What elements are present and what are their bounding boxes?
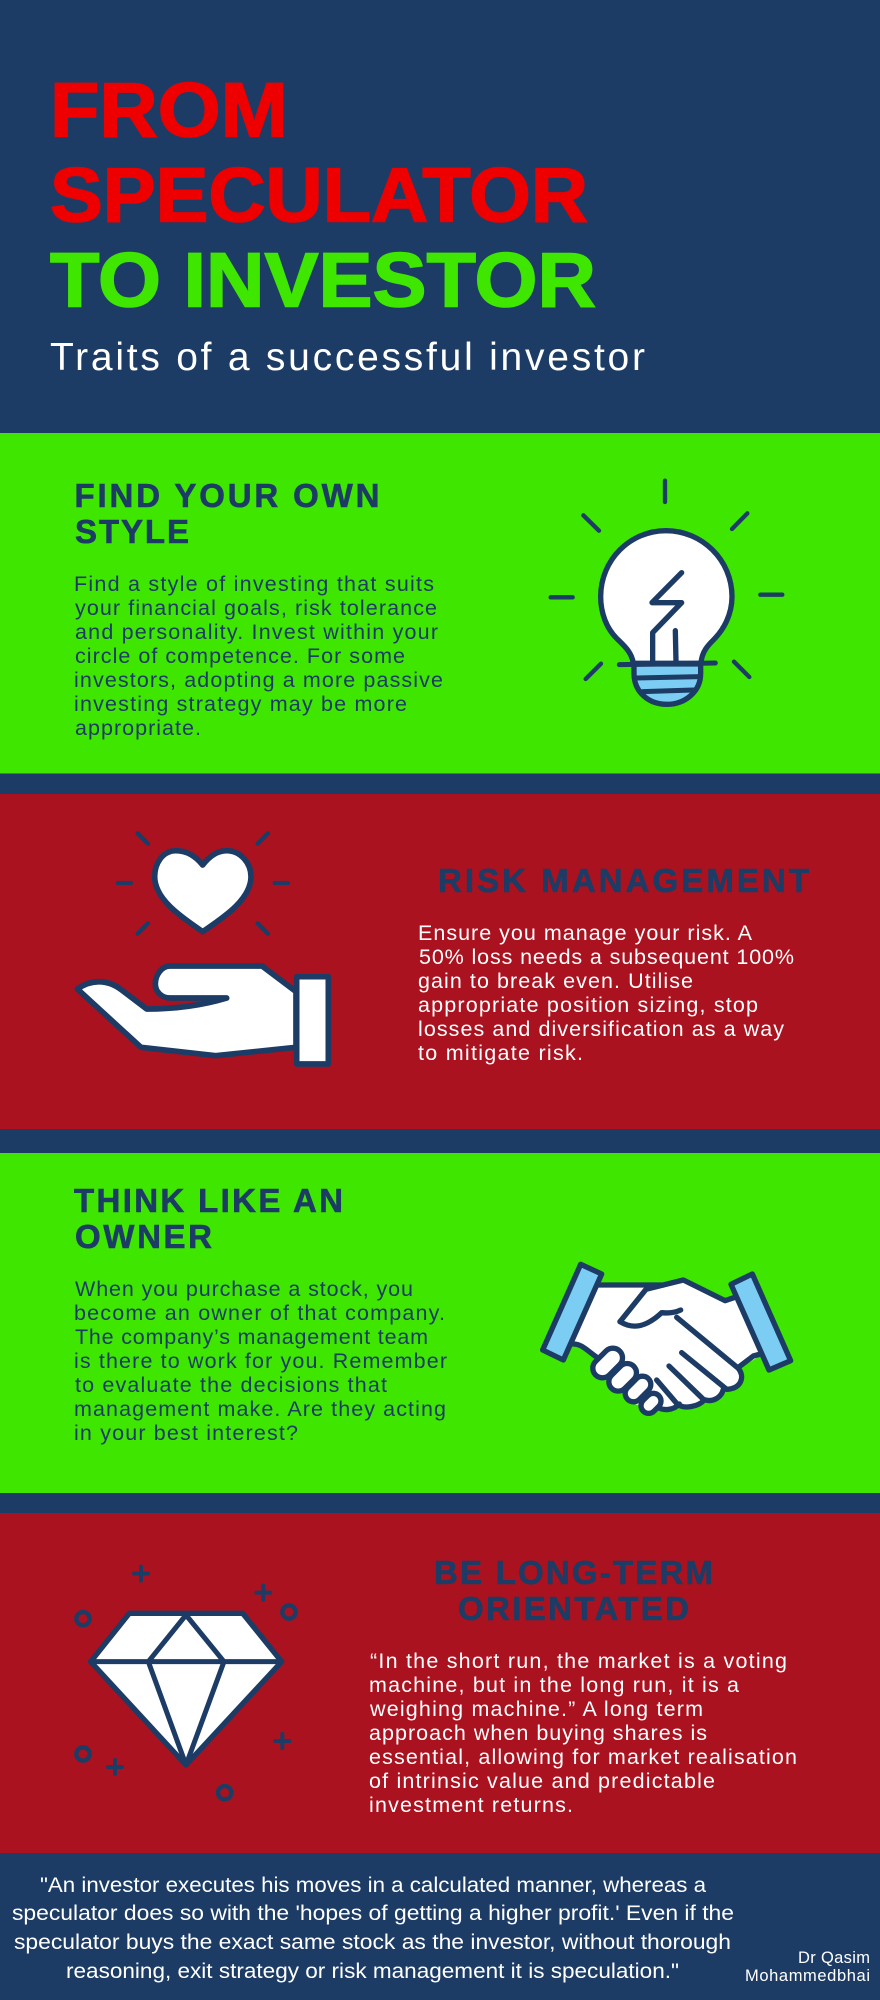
text: think like an owner: When you purchase a stock, you bbox=[75, 1277, 413, 1301]
text: think like an owner bbox=[74, 1277, 447, 1445]
text: risk management: appropriate position sizing, stop bbox=[418, 993, 758, 1017]
footer author credit bbox=[745, 1949, 870, 1985]
heading: think like an owner: THINK LIKE AN bbox=[74, 1182, 343, 1219]
text: find your own style: circle of competence. For some bbox=[75, 644, 405, 668]
icon: hand holding heart bbox=[77, 833, 328, 1064]
text: risk management: losses and diversification as a way bbox=[418, 1017, 784, 1041]
panel: find your own style bbox=[0, 433, 880, 774]
heading: find your own style: FIND YOUR OWN bbox=[74, 477, 380, 514]
footer quote: reasoning, exit strategy or risk management it is speculation." bbox=[66, 1959, 679, 1983]
panel: think like an owner bbox=[0, 1153, 880, 1493]
text: think like an owner: is there to work for you. Remember bbox=[74, 1349, 447, 1373]
text: find your own style: and personality. Invest within your bbox=[75, 620, 438, 644]
heading: find your own style bbox=[74, 477, 380, 550]
icon: diamond bbox=[76, 1567, 296, 1799]
text: be long-term orientated: essential, allowing for market realisation bbox=[369, 1745, 797, 1769]
heading: be long-term orientated: BE LONG-TERM bbox=[434, 1554, 713, 1591]
text: risk management: Ensure you manage your risk. A bbox=[418, 921, 753, 945]
panel: be long-term orientated bbox=[0, 1513, 880, 1853]
footer author credit: Mohammedbhai bbox=[745, 1967, 870, 1985]
heading: be long-term orientated: ORIENTATED bbox=[458, 1590, 689, 1627]
text: be long-term orientated: machine, but in the long run, it is a bbox=[369, 1673, 739, 1697]
subtitle: Traits of a successful investor bbox=[50, 336, 645, 379]
heading: be long-term orientated bbox=[434, 1554, 713, 1627]
text: risk management: to mitigate risk. bbox=[418, 1041, 583, 1065]
footer quote: speculator buys the exact same stock as the investor, without thorough bbox=[14, 1930, 731, 1954]
text: risk management: gain to break even. Utilise bbox=[418, 969, 693, 993]
text: risk management bbox=[418, 921, 794, 1065]
heading: think like an owner bbox=[74, 1182, 343, 1255]
text: find your own style bbox=[74, 572, 443, 740]
text: be long-term orientated: “In the short run, the market is a voting bbox=[370, 1649, 787, 1673]
text: find your own style: your financial goals, risk tolerance bbox=[75, 596, 437, 620]
text: find your own style: investors, adopting a more passive bbox=[74, 668, 443, 692]
title: TO INVESTOR bbox=[50, 238, 596, 324]
title bbox=[50, 68, 596, 324]
text: be long-term orientated: investment returns. bbox=[369, 1793, 573, 1817]
title: FROM bbox=[50, 68, 288, 154]
panel: risk management bbox=[0, 794, 880, 1129]
text: think like an owner: to evaluate the decisions that bbox=[75, 1373, 387, 1397]
heading: risk management: RISK MANAGEMENT bbox=[438, 862, 809, 899]
heading: think like an owner: OWNER bbox=[75, 1218, 212, 1255]
footer quote: speculator does so with the 'hopes of getting a higher profit.' Even if the bbox=[12, 1901, 734, 1925]
text: think like an owner: management make. Are they acting bbox=[74, 1397, 446, 1421]
text: risk management: 50% loss needs a subsequent 100% bbox=[419, 945, 794, 969]
text: find your own style: Find a style of investing that suits bbox=[74, 572, 434, 596]
text: find your own style: appropriate. bbox=[75, 716, 201, 740]
text: be long-term orientated: weighing machine.” A long term bbox=[369, 1697, 703, 1721]
footer quote: "An investor executes his moves in a calculated manner, whereas a bbox=[40, 1873, 706, 1897]
text: be long-term orientated: of intrinsic value and predictable bbox=[369, 1769, 715, 1793]
footer author credit: Dr Qasim bbox=[798, 1949, 870, 1967]
text: think like an owner: in your best interest? bbox=[74, 1421, 298, 1445]
text: think like an owner: The company’s management team bbox=[75, 1325, 428, 1349]
text: find your own style: investing strategy may be more bbox=[74, 692, 407, 716]
heading: find your own style: STYLE bbox=[75, 513, 189, 550]
icon: light bulb bbox=[551, 481, 782, 704]
footer quote bbox=[12, 1873, 734, 1983]
text: think like an owner: become an owner of that company. bbox=[74, 1301, 445, 1325]
text: be long-term orientated bbox=[369, 1649, 797, 1817]
text: be long-term orientated: approach when buying shares is bbox=[369, 1721, 707, 1745]
title: SPECULATOR bbox=[50, 152, 588, 238]
icon: handshake bbox=[543, 1264, 791, 1417]
